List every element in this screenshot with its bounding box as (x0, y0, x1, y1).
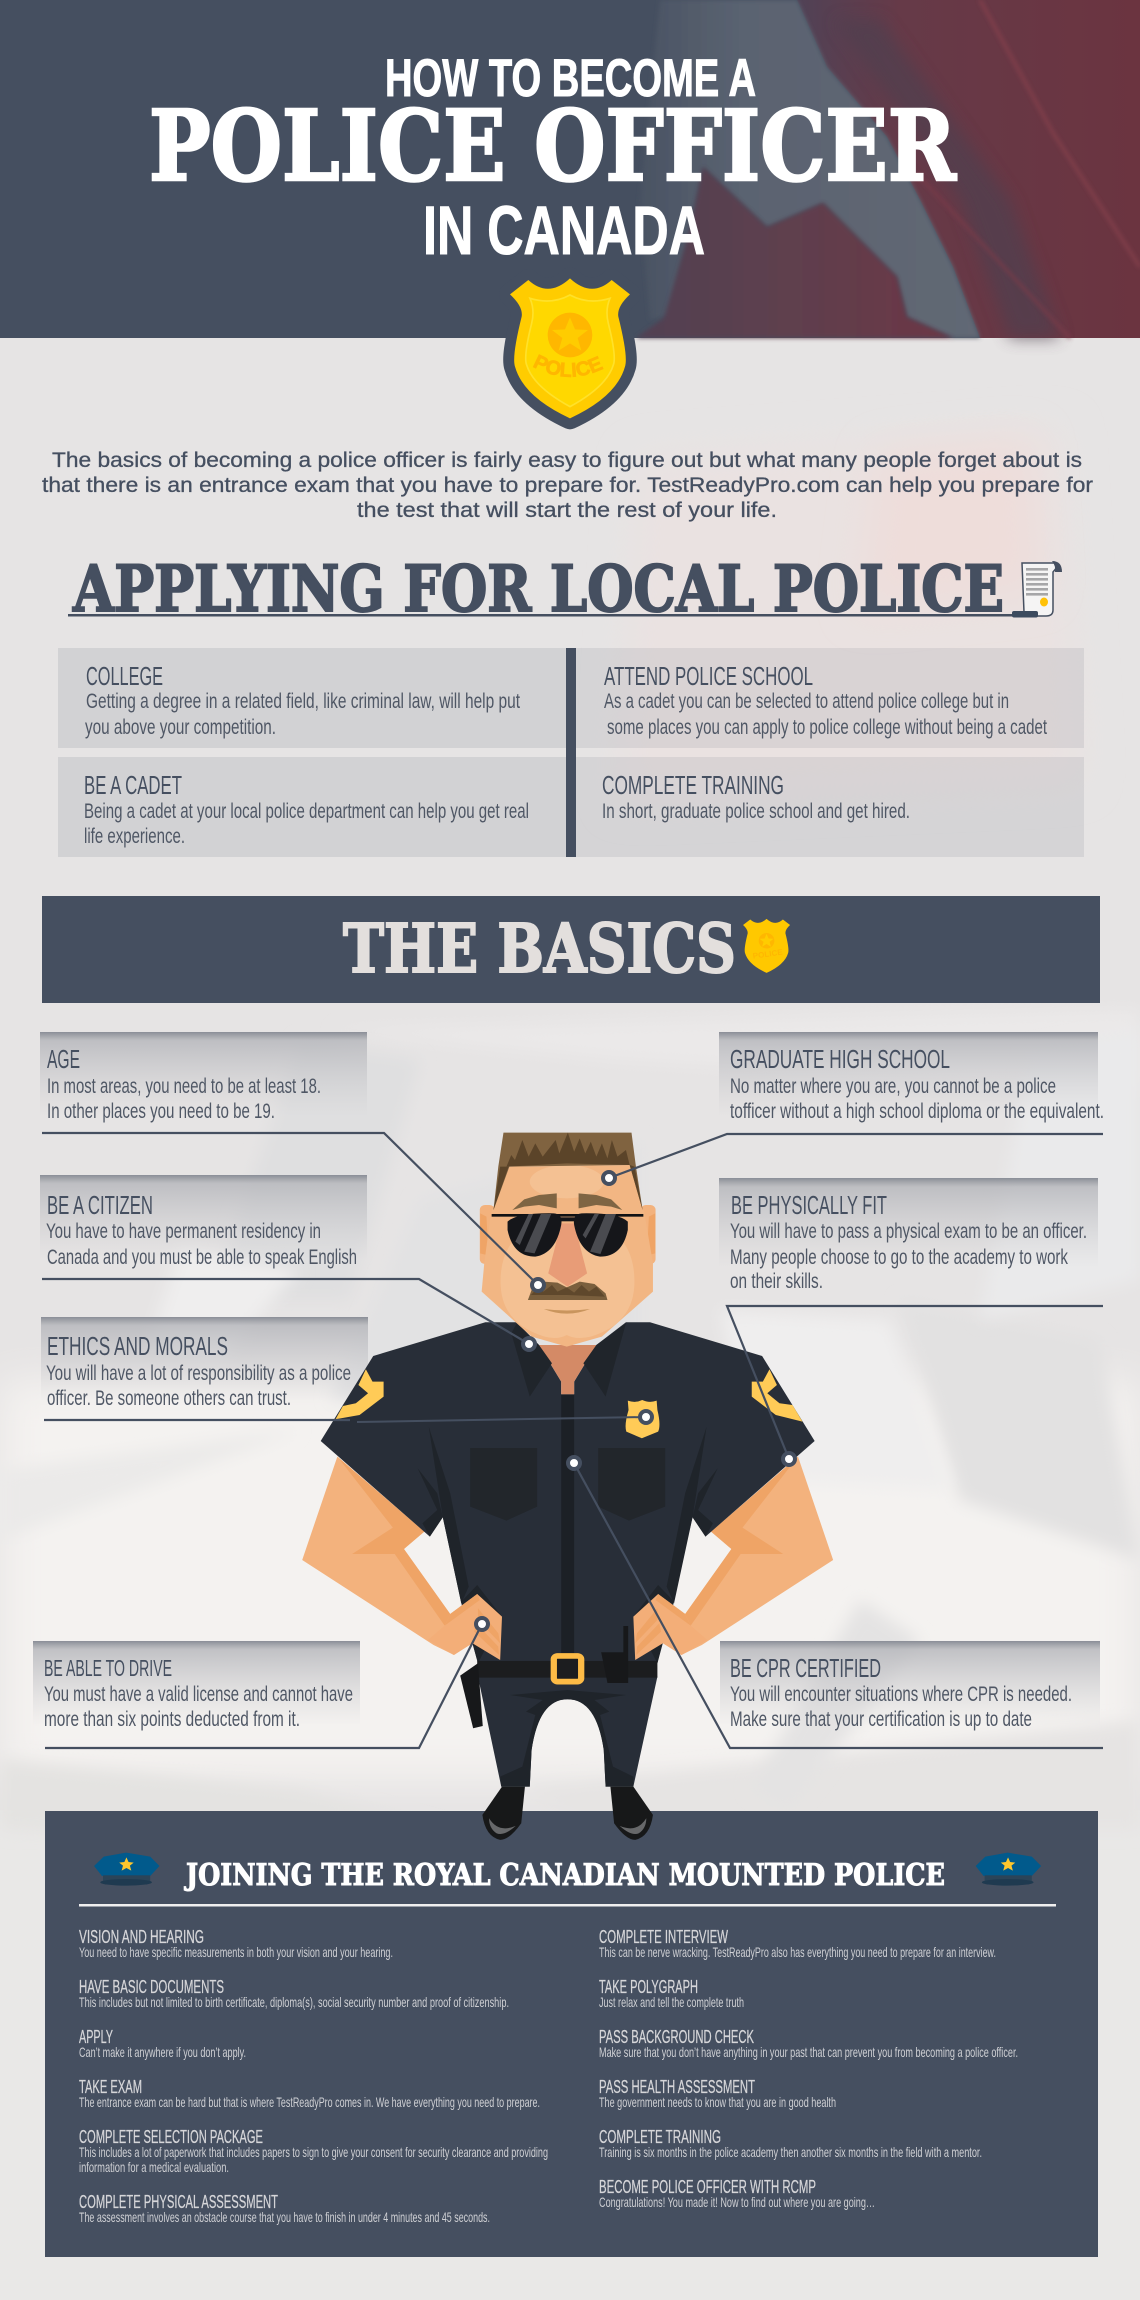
collar (511, 1323, 552, 1397)
callout: be able to drive (33, 1641, 360, 1731)
callout: ethics and morals: ETHICS AND MORALS (47, 1331, 228, 1361)
icon: police hat left (94, 1853, 160, 1886)
icon: small badge (743, 919, 790, 973)
rcmp left column: information for a medical evaluation. (79, 2159, 229, 2175)
panel: complete training (576, 757, 1084, 857)
panel: be a cadet: Being a cadet at your local police department can help you get real (84, 800, 529, 823)
panel: attend police school (576, 648, 1084, 748)
panel: attend police school: ATTEND POLICE SCHOOL (604, 661, 813, 691)
sunglasses (492, 1214, 643, 1217)
icon: scroll (1012, 561, 1062, 618)
callout: graduate high school (719, 1032, 1104, 1123)
callout: be a citizen: You have to have permanent residency in (46, 1220, 321, 1243)
rcmp title: JOINING THE ROYAL CANADIAN MOUNTED POLICE (183, 1858, 945, 1893)
callout: age: In other places you need to be 19. (47, 1100, 275, 1123)
callout: be a citizen (40, 1175, 367, 1269)
rcmp left column: This includes but not limited to birth certificate, diploma(s), social security number and proof of citizenship. (79, 1994, 509, 2010)
shirt (321, 1322, 815, 1663)
hotspot dots (476, 1172, 795, 1630)
rcmp right column: The government needs to know that you are in good health (599, 2094, 836, 2110)
hair (493, 1133, 643, 1210)
head (480, 1133, 656, 1347)
panel: be a cadet: BE A CADET (84, 770, 182, 800)
rcmp left column: COMPLETE PHYSICAL ASSESSMENT (79, 2192, 278, 2212)
rcmp right column: PASS BACKGROUND CHECK (599, 2027, 754, 2047)
eyebrows (512, 1193, 557, 1210)
panel: complete training: In short, graduate police school and get hired. (602, 800, 910, 823)
callout: ethics and morals: You will have a lot of responsibility as a police (46, 1362, 351, 1385)
callout: be cpr certified (720, 1641, 1100, 1731)
rcmp left column: VISION AND HEARING (79, 1927, 204, 1947)
shoulder patch right (752, 1369, 802, 1422)
rcmp left column: APPLY (79, 2027, 113, 2047)
connector lines (42, 1133, 1103, 1748)
shoulder patch left (336, 1369, 384, 1419)
panel: college: Getting a degree in a related field, like criminal law, will help put (86, 690, 520, 713)
title: IN CANADA (423, 192, 705, 269)
panel: college: you above your competition. (85, 716, 276, 739)
icon: police badge (503, 278, 637, 430)
rcmp left column: Can’t make it anywhere if you don’t apply. (79, 2044, 246, 2060)
callout: be physically fit: on their skills. (730, 1270, 823, 1293)
rcmp right column: COMPLETE TRAINING (599, 2127, 721, 2147)
callout: age (40, 1032, 367, 1123)
rcmp right column: TAKE POLYGRAPH (599, 1977, 698, 1997)
icon: police hat right (976, 1853, 1041, 1886)
arms (302, 1457, 833, 1660)
callout: be physically fit: BE PHYSICALLY FIT (731, 1190, 887, 1220)
icon: police badge: POLICE (533, 354, 604, 378)
header flag grey band (640, 0, 980, 338)
illustration: police officer (302, 1133, 833, 1840)
header banner (0, 0, 1140, 338)
rcmp left column: TAKE EXAM (79, 2077, 142, 2097)
nose (548, 1223, 587, 1287)
callout: be a citizen: Canada and you must be able to speak English (47, 1246, 357, 1269)
panel: rcmp (45, 1811, 1098, 2257)
rcmp left column: HAVE BASIC DOCUMENTS (79, 1977, 224, 1997)
header flag red lower (636, 167, 953, 338)
rcmp left column: The entrance exam can be hard but that is where TestReadyPro comes in. We have everything you need to prepare. (79, 2094, 540, 2110)
callout: ethics and morals (41, 1317, 368, 1410)
rcmp right column (599, 1927, 1018, 2210)
ears (480, 1205, 495, 1264)
panel: college: COLLEGE (86, 661, 163, 691)
moustache (528, 1282, 607, 1300)
heading banner: the basics (42, 896, 1100, 1003)
rcmp left column: You need to have specific measurements in both your vision and your hearing. (79, 1944, 393, 1960)
heading banner: the basics: THE BASICS (343, 909, 736, 988)
rcmp left column: This includes a lot of paperwork that includes papers to sign to give your consent for security clearance and providing (79, 2144, 548, 2160)
callout: age: In most areas, you need to be at least 18. (47, 1075, 321, 1098)
intro text: the test that will start the rest of your life. (357, 499, 777, 522)
neck (539, 1345, 596, 1394)
rcmp left column: The assessment involves an obstacle course that you have to finish in under 4 minutes and 45 seconds. (79, 2209, 490, 2225)
intro text: The basics of becoming a police officer is fairly easy to figure out but what many people forget about is (52, 449, 1082, 472)
title (149, 49, 957, 269)
callout: be able to drive: BE ABLE TO DRIVE (44, 1655, 172, 1681)
placket (561, 1394, 574, 1661)
hands (428, 1594, 707, 1660)
header flag red right (797, 0, 1140, 338)
shoes (482, 1787, 653, 1840)
title: POLICE OFFICER (149, 89, 957, 203)
callout: be physically fit (719, 1178, 1098, 1293)
shirt shadows (429, 1427, 469, 1603)
callout: be a citizen: BE A CITIZEN (47, 1190, 153, 1220)
callout: be able to drive: more than six points deducted from it. (44, 1708, 300, 1731)
callout: ethics and morals: officer. Be someone others can trust. (47, 1387, 291, 1410)
panel: college (58, 648, 566, 748)
mouth (544, 1309, 590, 1314)
intro text (42, 449, 1093, 522)
rcmp right column: PASS HEALTH ASSESSMENT (599, 2077, 755, 2097)
rcmp right column: Congratulations! You made it! Now to find out where you are going… (599, 2194, 875, 2210)
rcmp right column: COMPLETE INTERVIEW (599, 1927, 728, 1947)
icon: small badge: POLICE (752, 948, 784, 961)
rcmp left column: COMPLETE SELECTION PACKAGE (79, 2127, 263, 2147)
belt (460, 1626, 657, 1728)
rcmp left column (79, 1927, 548, 2225)
callout: be able to drive: You must have a valid license and cannot have (44, 1683, 353, 1706)
panel: be a cadet (58, 757, 566, 857)
callout: be cpr certified: Make sure that your certification is up to date (730, 1708, 1032, 1731)
pants (478, 1677, 657, 1787)
panel: applying steps (58, 648, 1084, 857)
rcmp right column: BECOME POLICE OFFICER WITH RCMP (599, 2177, 816, 2197)
chest badge (626, 1400, 659, 1438)
panel: complete training: COMPLETE TRAINING (602, 770, 784, 800)
callout: age: AGE (47, 1044, 80, 1074)
title: HOW TO BECOME A (385, 49, 756, 108)
callout: be cpr certified: BE CPR CERTIFIED (730, 1653, 881, 1683)
pockets (470, 1448, 537, 1521)
rcmp right column: Just relax and tell the complete truth (599, 1994, 744, 2010)
callout: graduate high school: GRADUATE HIGH SCHOOL (730, 1044, 950, 1074)
intro text: that there is an entrance exam that you have to prepare for. TestReadyPro.com can help you prepare for (42, 474, 1093, 497)
panel: be a cadet: life experience. (84, 825, 185, 848)
